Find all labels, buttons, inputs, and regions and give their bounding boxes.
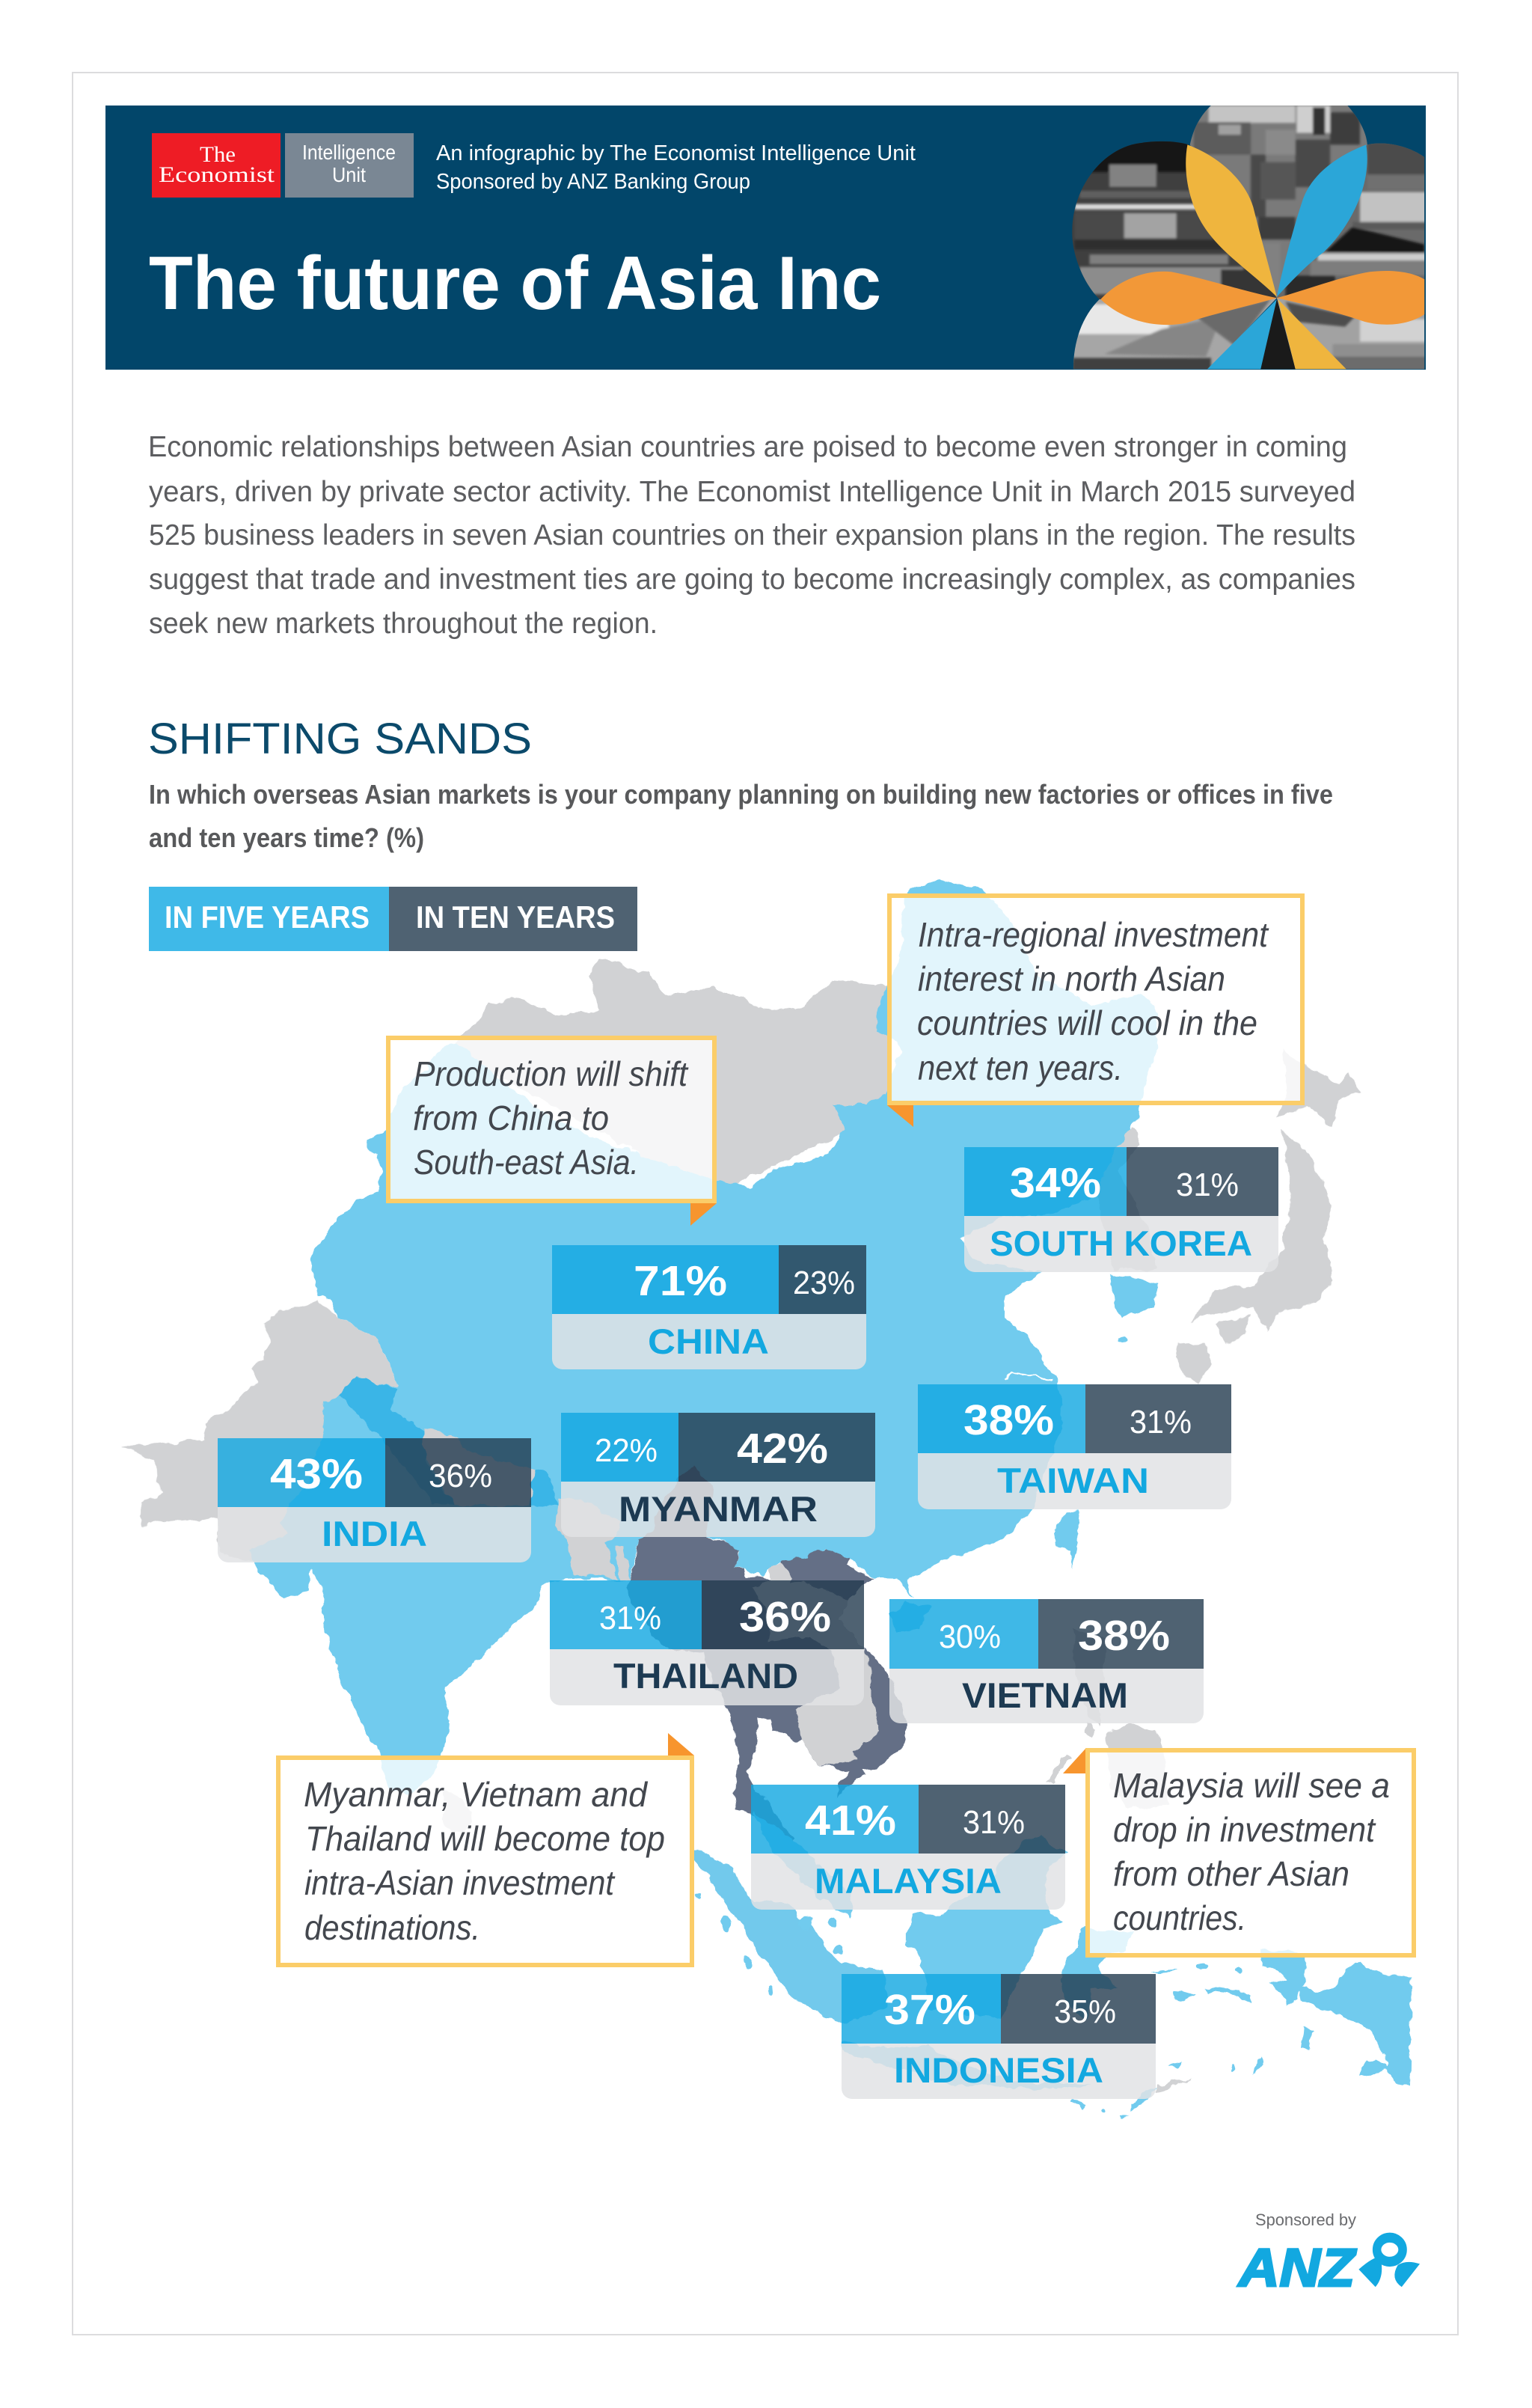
callout: Malaysia drop [1063,1749,1414,1955]
header credit text: An infographic by The Economist Intelligence Unit [436,141,916,165]
header credit text [436,141,916,194]
map: Indonesia and Borneo islands [801,1836,1412,2119]
header credit text: Sponsored by ANZ Banking Group [436,170,750,194]
data card: India: 43% [270,1450,363,1498]
map: Mongolia [456,959,889,1194]
callout: intra-regional investment [887,896,1302,1127]
callout: Myanmar Vietnam Thailand: destinations. [304,1908,480,1947]
logo: The Economist: The [200,142,236,167]
petal: blue upper [1277,144,1367,297]
map: China and India [249,880,1158,1794]
data card: Indonesia: 35% [1054,1993,1116,2030]
callout: Malaysia drop: countries. [1113,1898,1246,1937]
data card: Malaysia: MALAYSIA [815,1861,1002,1901]
photo petal: lower left coast [1072,297,1278,370]
intro paragraph [148,431,1355,640]
logo: The Economist [152,133,281,198]
callout: intra-regional investment: Intra-regional investment [918,915,1269,954]
intro paragraph: 525 business leaders in seven Asian countries on their expansion plans in the region. The results [149,519,1355,551]
data card: Vietnam [889,1599,1204,1723]
data card: Myanmar: 22% [595,1432,658,1469]
data card: India: INDIA [322,1514,427,1553]
map: Jeju [1116,1336,1128,1343]
logo: The Economist: Economist [159,162,275,187]
data card: South Korea [964,1147,1278,1272]
data card: China: CHINA [648,1321,769,1361]
map: Myanmar Thailand Vietnam [625,1465,907,1843]
sponsor block [1237,2210,1420,2298]
photo petal: lower right harbour [1275,297,1427,370]
callout: production shift: Production will shift [414,1054,689,1093]
data card: Thailand [550,1580,864,1705]
data card: Indonesia: 37% [884,1986,975,2034]
callout: Myanmar Vietnam Thailand: Thailand will become top [305,1819,665,1858]
data card: China [552,1245,866,1369]
photo wedge: bottom bridge [1260,298,1296,369]
legend: in ten years [389,887,637,951]
data card: Malaysia: 31% [963,1804,1025,1841]
petal: blue lower [1207,299,1277,369]
legend: in five years [149,887,389,951]
data card: Taiwan: 31% [1130,1404,1192,1440]
data card: South Korea: SOUTH KOREA [990,1223,1252,1263]
data card: Indonesia [842,1974,1156,2099]
data card: Taiwan: 38% [963,1396,1054,1444]
photo petal: night harbour [1070,137,1278,302]
section heading: SHIFTING SANDS [148,715,532,763]
legend: in five years: IN FIVE YEARS [165,899,370,935]
data card: China: 23% [793,1265,855,1301]
data card: Vietnam: 30% [939,1619,1001,1655]
callout: Malaysia drop: drop in investment [1113,1810,1376,1849]
data card: Malaysia [751,1785,1065,1910]
header banner [105,105,1427,370]
data card: India: 36% [429,1458,492,1494]
intro paragraph: years, driven by private sector activity. The Economist Intelligence Unit in March 2015 surveyed [149,476,1355,508]
survey question [149,779,1333,853]
map: Timor [1156,2079,1190,2091]
callout: Myanmar Vietnam Thailand: Myanmar, Vietnam and [304,1775,648,1814]
map: Sri Lanka [442,1791,474,1833]
callout: intra-regional investment: next ten years. [918,1048,1123,1087]
map: small islands off Sumatra [696,1892,773,1993]
map: Sumatra [693,1848,889,2023]
map: Japan [1174,1049,1361,1385]
map: Yangtze estuary line [1005,1372,1053,1382]
sponsored by text: Sponsored by [1255,2210,1356,2229]
map: North Korea [1097,1128,1156,1270]
data card: India [218,1438,531,1562]
callout: intra-regional investment: interest in north Asian [918,959,1225,998]
title: The future of Asia Inc [149,242,881,326]
callout: Malaysia drop: from other Asian [1113,1854,1349,1893]
data card: Thailand: 31% [599,1600,661,1637]
data card: Thailand: THAILAND [613,1656,798,1696]
map: Taiwan [1055,1510,1079,1568]
map: Arakan strip [616,1545,631,1580]
callout: production shift [388,1038,717,1226]
survey question: and ten years time? (%) [149,822,424,853]
map: South Korea [1111,1273,1158,1318]
logo: Intelligence Unit [285,133,414,198]
petal: yellow lower [1278,299,1346,369]
data card: South Korea: 34% [1010,1159,1101,1207]
data card: Myanmar [561,1413,875,1537]
callout: intra-regional investment: countries will cool in the [917,1003,1257,1042]
logo: Intelligence Unit: Intelligence [302,141,396,164]
map of Asia [121,880,1412,2119]
petal: yellow upper [1186,144,1277,297]
data card: Myanmar: MYANMAR [619,1489,818,1529]
data card: Taiwan: TAIWAN [997,1461,1149,1500]
logo: Intelligence Unit: Unit [332,163,366,186]
callout: Myanmar Vietnam Thailand: intra-Asian investment [304,1863,616,1902]
petal: orange left [1100,272,1277,325]
ANZ wordmark: ANZ [1237,2239,1357,2298]
data card: Thailand: 36% [739,1593,831,1641]
map: Bhutan [530,1470,559,1508]
data card: Myanmar: 42% [737,1425,828,1473]
data card: Malaysia: 41% [805,1797,896,1845]
data card: Taiwan [918,1384,1231,1509]
callout: Myanmar Vietnam Thailand [278,1733,694,1965]
data card: South Korea: 31% [1176,1167,1239,1203]
intro paragraph: suggest that trade and investment ties are going to become increasingly complex, as companies [149,563,1355,596]
legend: in ten years: IN TEN YEARS [416,899,615,935]
survey question: In which overseas Asian markets is your company planning on building new factories or offices in five [149,779,1333,810]
intro paragraph: Economic relationships between Asian countries are poised to become even stronger in coming [148,431,1347,463]
data card: China: 71% [634,1257,727,1305]
map: Nepal [337,1376,456,1506]
map: Malay peninsula [755,1812,851,1917]
callout: production shift: South-east Asia. [414,1143,639,1182]
photo petal: port cranes [1275,140,1427,299]
map: Laos and Cambodia [753,1564,879,1765]
icon: ANZ figures [1358,2237,1420,2287]
callout: production shift: from China to [413,1098,609,1137]
callout: Malaysia drop: Malaysia will see a [1113,1766,1390,1805]
flower photo collage [1070,105,1427,370]
banner background [105,106,1426,370]
photo petal: city street [1186,105,1373,299]
data card: Vietnam: VIETNAM [962,1675,1128,1715]
map: Bangladesh [554,1500,618,1578]
map: Pakistan and Afghanistan [121,1301,397,1562]
data card: Indonesia: INDONESIA [894,2050,1103,2090]
legend [149,887,637,951]
data card: Vietnam: 38% [1078,1612,1170,1660]
map: Himalayan grey states [425,1428,534,1506]
map: Hainan [891,1601,930,1634]
map: Philippines [1047,1628,1168,1809]
intro paragraph: seek new markets throughout the region. [149,608,658,640]
petal: orange right [1277,271,1424,325]
